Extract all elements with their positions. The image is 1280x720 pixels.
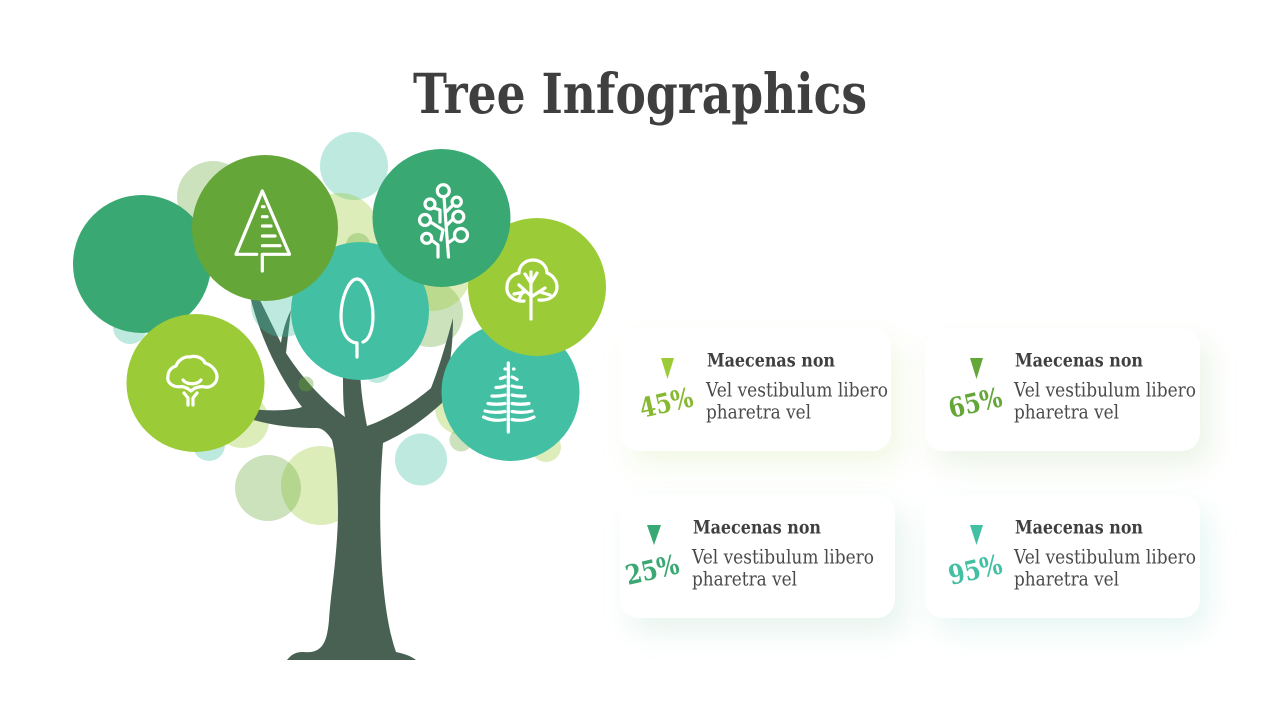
percentage: 45%: [637, 382, 696, 425]
percentage: 95%: [946, 549, 1005, 592]
card body text: Vel vestibulum libero: [705, 378, 888, 402]
card body text: Vel vestibulum libero: [1013, 546, 1196, 568]
card heading: Maecenas non: [707, 350, 835, 372]
card body text: pharetra vel: [692, 568, 797, 590]
card body text: pharetra vel: [706, 400, 811, 424]
marker triangle: [647, 525, 661, 545]
background pale circles: [113, 132, 561, 525]
title: Tree Infographics: [413, 61, 867, 126]
card 2: 65%: [925, 328, 1200, 451]
card 4: 95%: [925, 495, 1200, 618]
icon: round tree: [507, 260, 557, 319]
percentage: 25%: [623, 549, 682, 592]
circle: lime with round tree icon: [468, 218, 606, 356]
icon: oak tree: [168, 356, 217, 405]
card body text: pharetra vel: [1014, 568, 1119, 590]
circle: teal with leaf tree icon: [291, 242, 429, 380]
marker triangle: [970, 525, 983, 545]
card heading: Maecenas non: [693, 516, 821, 538]
card 1: 45%: [620, 328, 891, 451]
tree trunk and branches: [250, 296, 453, 660]
card heading: Maecenas non: [1015, 350, 1143, 372]
card heading: Maecenas non: [1015, 516, 1143, 538]
tree illustration: [73, 132, 606, 660]
circle: green with triangular pine icon: [192, 155, 338, 301]
circle: dark green with branching tree icon: [372, 149, 510, 287]
card body text: Vel vestibulum libero: [1013, 378, 1196, 402]
card body text: Vel vestibulum libero: [691, 546, 874, 568]
icon: branching tree: [420, 185, 468, 257]
circle: lime with oak icon: [126, 314, 264, 452]
circle: dark green, blank: [73, 195, 211, 333]
circle: teal with fir icon: [442, 323, 580, 461]
icon: leaf tree: [341, 279, 373, 357]
icon: triangular pine: [236, 191, 290, 271]
card 3: 25%: [620, 495, 895, 618]
icon: fir tree: [484, 363, 534, 432]
pale circles over the branches: [251, 273, 315, 392]
card body text: pharetra vel: [1014, 400, 1119, 424]
percentage: 65%: [946, 382, 1005, 425]
marker triangle: [970, 358, 983, 379]
marker triangle: [661, 358, 674, 379]
